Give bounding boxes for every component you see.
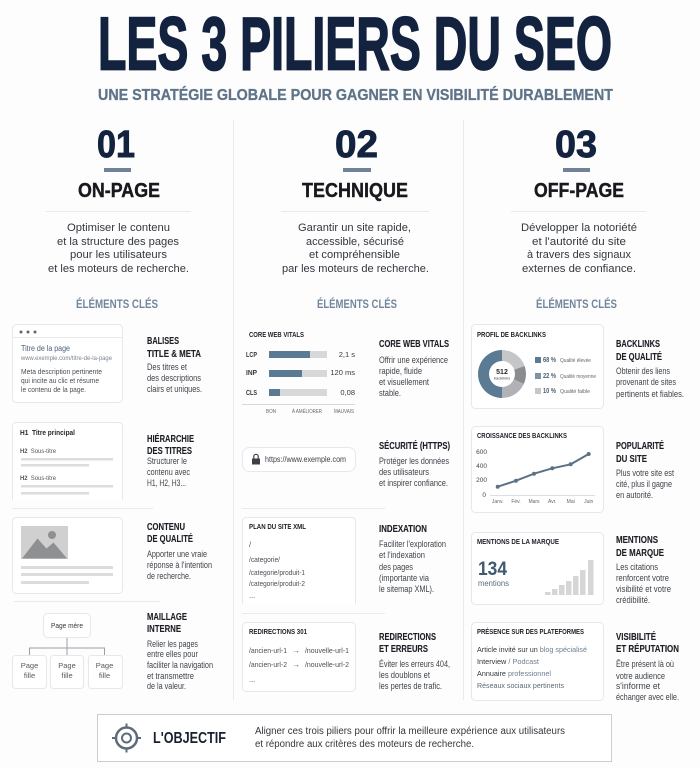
diagram: internal linking tree: Page: [58, 661, 76, 670]
panel: pillar 2 technique: [242, 124, 450, 692]
pillar 3 description: [521, 222, 637, 275]
pillar 3 description: Développer la notoriété: [521, 222, 637, 234]
pillar 3 key elements heading: ÉLÉMENTS CLÉS: [536, 296, 617, 311]
legend: 22 %: [543, 373, 557, 380]
text: visibilite et reputation: [616, 630, 679, 702]
pillar 2 description: par les moteurs de recherche.: [282, 263, 429, 275]
text: balises title et meta: BALISES: [147, 335, 179, 347]
text: redirections et erreurs: les pertes de trafic.: [379, 681, 442, 691]
text: maillage interne: MAILLAGE: [147, 611, 187, 623]
text: popularite du site: DU SITE: [616, 453, 647, 465]
chart: core web vitals bars: BON: [266, 409, 276, 415]
callout: objective banner: Aligner ces trois piliers pour offrir la meilleure expérience aux utilisateurs: [255, 726, 565, 737]
text: balises title et meta: TITLE & META: [147, 348, 201, 360]
text: core web vitals: CORE WEB VITALS: [379, 338, 449, 350]
text: core web vitals: [379, 338, 449, 398]
text: hierarchie des titres: H1, H2, H3...: [147, 478, 186, 488]
card: backlink growth line chart: 400: [476, 463, 487, 470]
pillar 1 description: Optimiser le contenu: [67, 222, 170, 234]
text: redirections et erreurs: les doublons et: [379, 670, 430, 680]
callout: objective banner: L'OBJECTIF: [153, 730, 226, 747]
chart: core web vitals bars: 2,1 s: [339, 350, 355, 359]
legend: Qualité élevée: [560, 358, 591, 364]
card: 301 redirects: REDIRECTIONS 301: [249, 627, 307, 636]
pillar 3 description: à travers des signaux: [527, 249, 631, 261]
card: backlink growth line chart: Mai: [567, 499, 575, 505]
card: backlink growth line chart: 600: [476, 449, 487, 456]
legend: [535, 357, 596, 395]
text: mentions de marque: Les citations: [616, 562, 658, 572]
chart: donut: [478, 350, 526, 398]
text: mentions de marque: [616, 534, 671, 605]
pillar 2 description: accessible, sécurisé: [306, 236, 404, 248]
card: search snippet: Meta description pertinente: [21, 367, 102, 376]
text: popularite du site: POPULARITÉ: [616, 439, 664, 452]
card: 301 redirects: [242, 622, 356, 692]
card: brand mentions: [472, 532, 604, 604]
card: platform presence: Annuaire professionnel: [477, 669, 551, 678]
card: backlink growth line chart: [472, 426, 604, 512]
card: platform presence: Réseaux sociaux pertinents: [477, 681, 564, 690]
pillar 2 description: Garantir un site rapide,: [298, 222, 411, 234]
text: popularite du site: Plus votre site est: [616, 468, 674, 478]
chart: donut: backlinks: [494, 376, 510, 380]
card: backlink profile donut: PROFIL DE BACKLINKS: [477, 330, 546, 339]
card: platform presence: [472, 622, 604, 700]
card: backlink growth line chart: Avr.: [548, 499, 557, 505]
card: brand mentions: 134: [478, 559, 507, 580]
text: contenu de qualite: réponse à l'intention: [147, 560, 212, 570]
text: securite https: des utilisateurs: [379, 467, 429, 477]
text: visibilite et reputation: VISIBILITÉ: [616, 630, 656, 643]
card: search snippet: qui incite au clic et résume: [21, 376, 99, 385]
pillar 3 description: externes de confiance.: [522, 263, 636, 275]
text: maillage interne: Relier les pages: [147, 639, 198, 649]
text: balises title et meta: [147, 335, 202, 394]
text: maillage interne: [147, 611, 213, 691]
card: 301 redirects: /nouvelle-url-2: [305, 660, 349, 669]
text: visibilite et reputation: échanger avec elle.: [616, 692, 679, 702]
pillar 3 description: et l'autorité du site: [532, 236, 626, 248]
pillar 3 header: 03: [555, 124, 597, 166]
text: mentions de marque: MENTIONS: [616, 534, 658, 546]
text: visibilite et reputation: votre audience: [616, 671, 665, 681]
card: heading hierarchy: [12, 422, 122, 500]
card: xml sitemap: /: [249, 540, 252, 549]
text: contenu de qualite: de recherche.: [147, 571, 191, 581]
card: 301 redirects: ...: [249, 675, 255, 684]
text: maillage interne: de la valeur.: [147, 681, 186, 691]
card: 301 redirects: /ancien-url-2: [249, 660, 287, 669]
pillar 1 description: pour les utilisateurs: [70, 249, 167, 261]
card: platform presence: PRÉSENCE SUR DES PLATEFORMES: [477, 627, 584, 636]
card: 301 redirects: →: [292, 646, 300, 655]
text: contenu de qualite: CONTENU: [147, 521, 185, 533]
card: heading hierarchy: H1 Titre principal: [20, 428, 75, 437]
panel: pillar 1 on-page: [12, 124, 213, 691]
pillar 1 header: 01: [97, 124, 135, 166]
chart: core web vitals bars: LCP: [246, 350, 257, 359]
card: search snippet: Titre de la page: [21, 344, 70, 353]
diagram: internal linking tree: [12, 614, 122, 688]
url bar: https: https://www.exemple.com: [265, 455, 346, 464]
text: contenu de qualite: [147, 521, 212, 581]
text: core web vitals: stable.: [379, 388, 401, 398]
text: redirections et erreurs: Éviter les erreurs 404,: [379, 659, 450, 669]
legend: Qualité faible: [560, 389, 590, 395]
card: backlink growth line chart: 200: [476, 477, 487, 484]
chart: core web vitals bars: CLS: [246, 388, 257, 397]
text: indexation: (importante via: [379, 573, 429, 583]
card: heading hierarchy: H2 Sous-titre: [20, 449, 57, 455]
card: backlink growth line chart: Juin: [584, 499, 593, 505]
text: redirections et erreurs: [379, 631, 450, 691]
text: hierarchie des titres: [147, 432, 194, 488]
text: indexation: INDEXATION: [379, 523, 427, 535]
legend: 10 %: [543, 388, 557, 395]
text: hierarchie des titres: contenu avec: [147, 467, 190, 477]
pillar 2 header: [281, 124, 429, 212]
text: mentions de marque: visibilité et votre: [616, 584, 671, 594]
diagram: internal linking tree: Page mère: [51, 621, 83, 630]
icon: target: [112, 724, 141, 752]
chart: mentions bars: [545, 560, 594, 595]
legend: 68 %: [543, 357, 557, 364]
card: xml sitemap: /categorie/produit-1: [249, 568, 305, 577]
card: xml sitemap: /categorie/produit-2: [249, 579, 305, 588]
card: 301 redirects: →: [292, 660, 300, 669]
diagram: internal linking tree: fille: [24, 671, 35, 680]
card: search snippet: [12, 324, 122, 402]
card: search snippet: www.exemple.com/titre-de-la-page: [20, 356, 113, 362]
card: xml sitemap: /categorie/: [249, 555, 281, 564]
text: indexation: [379, 523, 446, 594]
text: indexation: des pages: [379, 562, 413, 572]
text: indexation: Faciliter l'exploration: [379, 539, 446, 549]
card: brand mentions: MENTIONS DE LA MARQUE: [477, 537, 559, 546]
text: popularite du site: en autorité.: [616, 490, 653, 500]
card: search snippet: le contenu de la page.: [21, 385, 86, 394]
text: indexation: et l'indexation: [379, 550, 425, 560]
text: hierarchie des titres: DES TITRES: [147, 445, 192, 457]
text: mentions de marque: DE MARQUE: [616, 547, 664, 559]
card: backlink growth line chart: 0: [482, 492, 486, 499]
text: visibilite et reputation: s'informe et: [616, 681, 660, 691]
card: platform presence: Interview / Podcast: [477, 657, 540, 666]
diagram: internal linking tree: Page: [21, 661, 38, 670]
text: visibilite et reputation: Être présent là où: [616, 659, 674, 669]
card: heading hierarchy: H2 Sous-titre: [20, 476, 57, 482]
text: maillage interne: INTERNE: [147, 623, 181, 635]
pillar 1 description: [48, 222, 189, 275]
subtitle: UNE STRATÉGIE GLOBALE POUR GAGNER EN VISIBILITÉ DURABLEMENT: [98, 85, 613, 104]
card: brand mentions: mentions: [478, 579, 509, 588]
url bar: https: [242, 448, 356, 472]
card: xml sitemap: ...: [249, 591, 255, 600]
text: visibilite et reputation: ET RÉPUTATION: [616, 642, 679, 655]
panel: pillar 3 off-page: [472, 124, 684, 702]
pillar 2 key elements heading: ÉLÉMENTS CLÉS: [317, 296, 397, 311]
card: backlink profile donut: [472, 324, 604, 408]
text: backlinks de qualite: DE QUALITÉ: [616, 350, 662, 363]
text: backlinks de qualite: [616, 338, 684, 399]
text: core web vitals: rapide, fluide: [379, 366, 422, 376]
text: balises title et meta: Des titres et: [147, 362, 187, 372]
card: backlink growth line chart: Janv.: [492, 499, 503, 505]
text: backlinks de qualite: Obtenir des liens: [616, 366, 670, 376]
icon: padlock: [252, 454, 260, 464]
chart: core web vitals bars: MAUVAIS: [334, 409, 355, 415]
card: 301 redirects: /nouvelle-url-1: [305, 646, 349, 655]
text: balises title et meta: clairs et uniques.: [147, 384, 202, 394]
callout: objective banner: et répondre aux critères des moteurs de recherche.: [255, 739, 474, 750]
text: core web vitals: Offrir une expérience: [379, 355, 448, 365]
diagram: internal linking tree: fille: [61, 671, 73, 680]
pillar 3 header: OFF-PAGE: [534, 180, 624, 202]
text: redirections et erreurs: REDIRECTIONS: [379, 631, 436, 643]
text: backlinks de qualite: provenant de sites: [616, 377, 676, 387]
diagram: internal linking tree: Page: [96, 661, 113, 670]
text: securite https: SÉCURITÉ (HTTPS): [379, 439, 450, 452]
text: securite https: [379, 439, 450, 488]
text: balises title et meta: des descriptions: [147, 373, 201, 383]
text: maillage interne: entre elles pour: [147, 649, 198, 659]
card: quality content: [12, 518, 122, 594]
chart: core web vitals bars: 0,08: [340, 388, 355, 397]
chart: core web vitals bars: À AMÉLIORER: [292, 408, 322, 415]
text: mentions de marque: renforcent votre: [616, 573, 669, 583]
chart: core web vitals bars: 120 ms: [330, 368, 355, 377]
text: contenu de qualite: Apporter une vraie: [147, 549, 207, 559]
pillar 1 header: ON-PAGE: [78, 180, 160, 202]
chart: core web vitals bars: CORE WEB VITALS: [249, 330, 304, 339]
diagram: internal linking tree: fille: [99, 671, 110, 680]
text: redirections et erreurs: ET ERREURS: [379, 643, 428, 655]
text: securite https: et inspirer confiance.: [379, 478, 448, 488]
chart: donut: 512: [496, 369, 508, 376]
legend: Qualité moyenne: [560, 374, 596, 380]
card: backlink growth line chart: Mars: [528, 499, 540, 505]
pillar 1 description: et les moteurs de recherche.: [48, 263, 189, 275]
text: hierarchie des titres: Structurer le: [147, 456, 187, 466]
text: securite https: Protéger les données: [379, 456, 449, 466]
callout: objective banner: [98, 714, 612, 762]
pillar 1 description: et la structure des pages: [57, 236, 179, 248]
card: platform presence: Article invité sur un blog spécialisé: [477, 645, 587, 654]
pillar 3 header: [511, 124, 646, 212]
text: backlinks de qualite: pertinents et fiables.: [616, 389, 684, 399]
card: 301 redirects: /ancien-url-1: [249, 646, 287, 655]
pillar 2 description: [282, 222, 429, 275]
pillar 2 description: et compréhensible: [309, 249, 400, 261]
text: backlinks de qualite: BACKLINKS: [616, 338, 660, 350]
text: contenu de qualite: DE QUALITÉ: [147, 532, 193, 545]
pillar 1 header: [46, 124, 191, 212]
text: mentions de marque: crédibilité.: [616, 595, 650, 605]
text: popularite du site: cité, plus il gagne: [616, 479, 672, 489]
card: xml sitemap: PLAN DU SITE XML: [249, 522, 306, 531]
chart: core web vitals bars: INP: [246, 368, 257, 377]
text: popularite du site: [616, 439, 674, 500]
pillar 2 header: TECHNIQUE: [302, 180, 408, 202]
text: core web vitals: et visuellement: [379, 377, 429, 387]
card: backlink growth line chart: CROISSANCE DES BACKLINKS: [477, 431, 567, 440]
text: maillage interne: et transmettre: [147, 671, 194, 681]
text: hierarchie des titres: HIÉRARCHIE: [147, 432, 194, 445]
text: maillage interne: faciliter la navigation: [147, 660, 213, 670]
card: backlink growth line chart: Fév.: [511, 499, 521, 505]
chart: core web vitals bars: [242, 330, 355, 415]
text: indexation: le sitemap XML).: [379, 584, 434, 594]
pillar 1 key elements heading: ÉLÉMENTS CLÉS: [76, 296, 158, 311]
pillar 2 header: 02: [335, 124, 378, 166]
card: xml sitemap: [242, 518, 356, 604]
